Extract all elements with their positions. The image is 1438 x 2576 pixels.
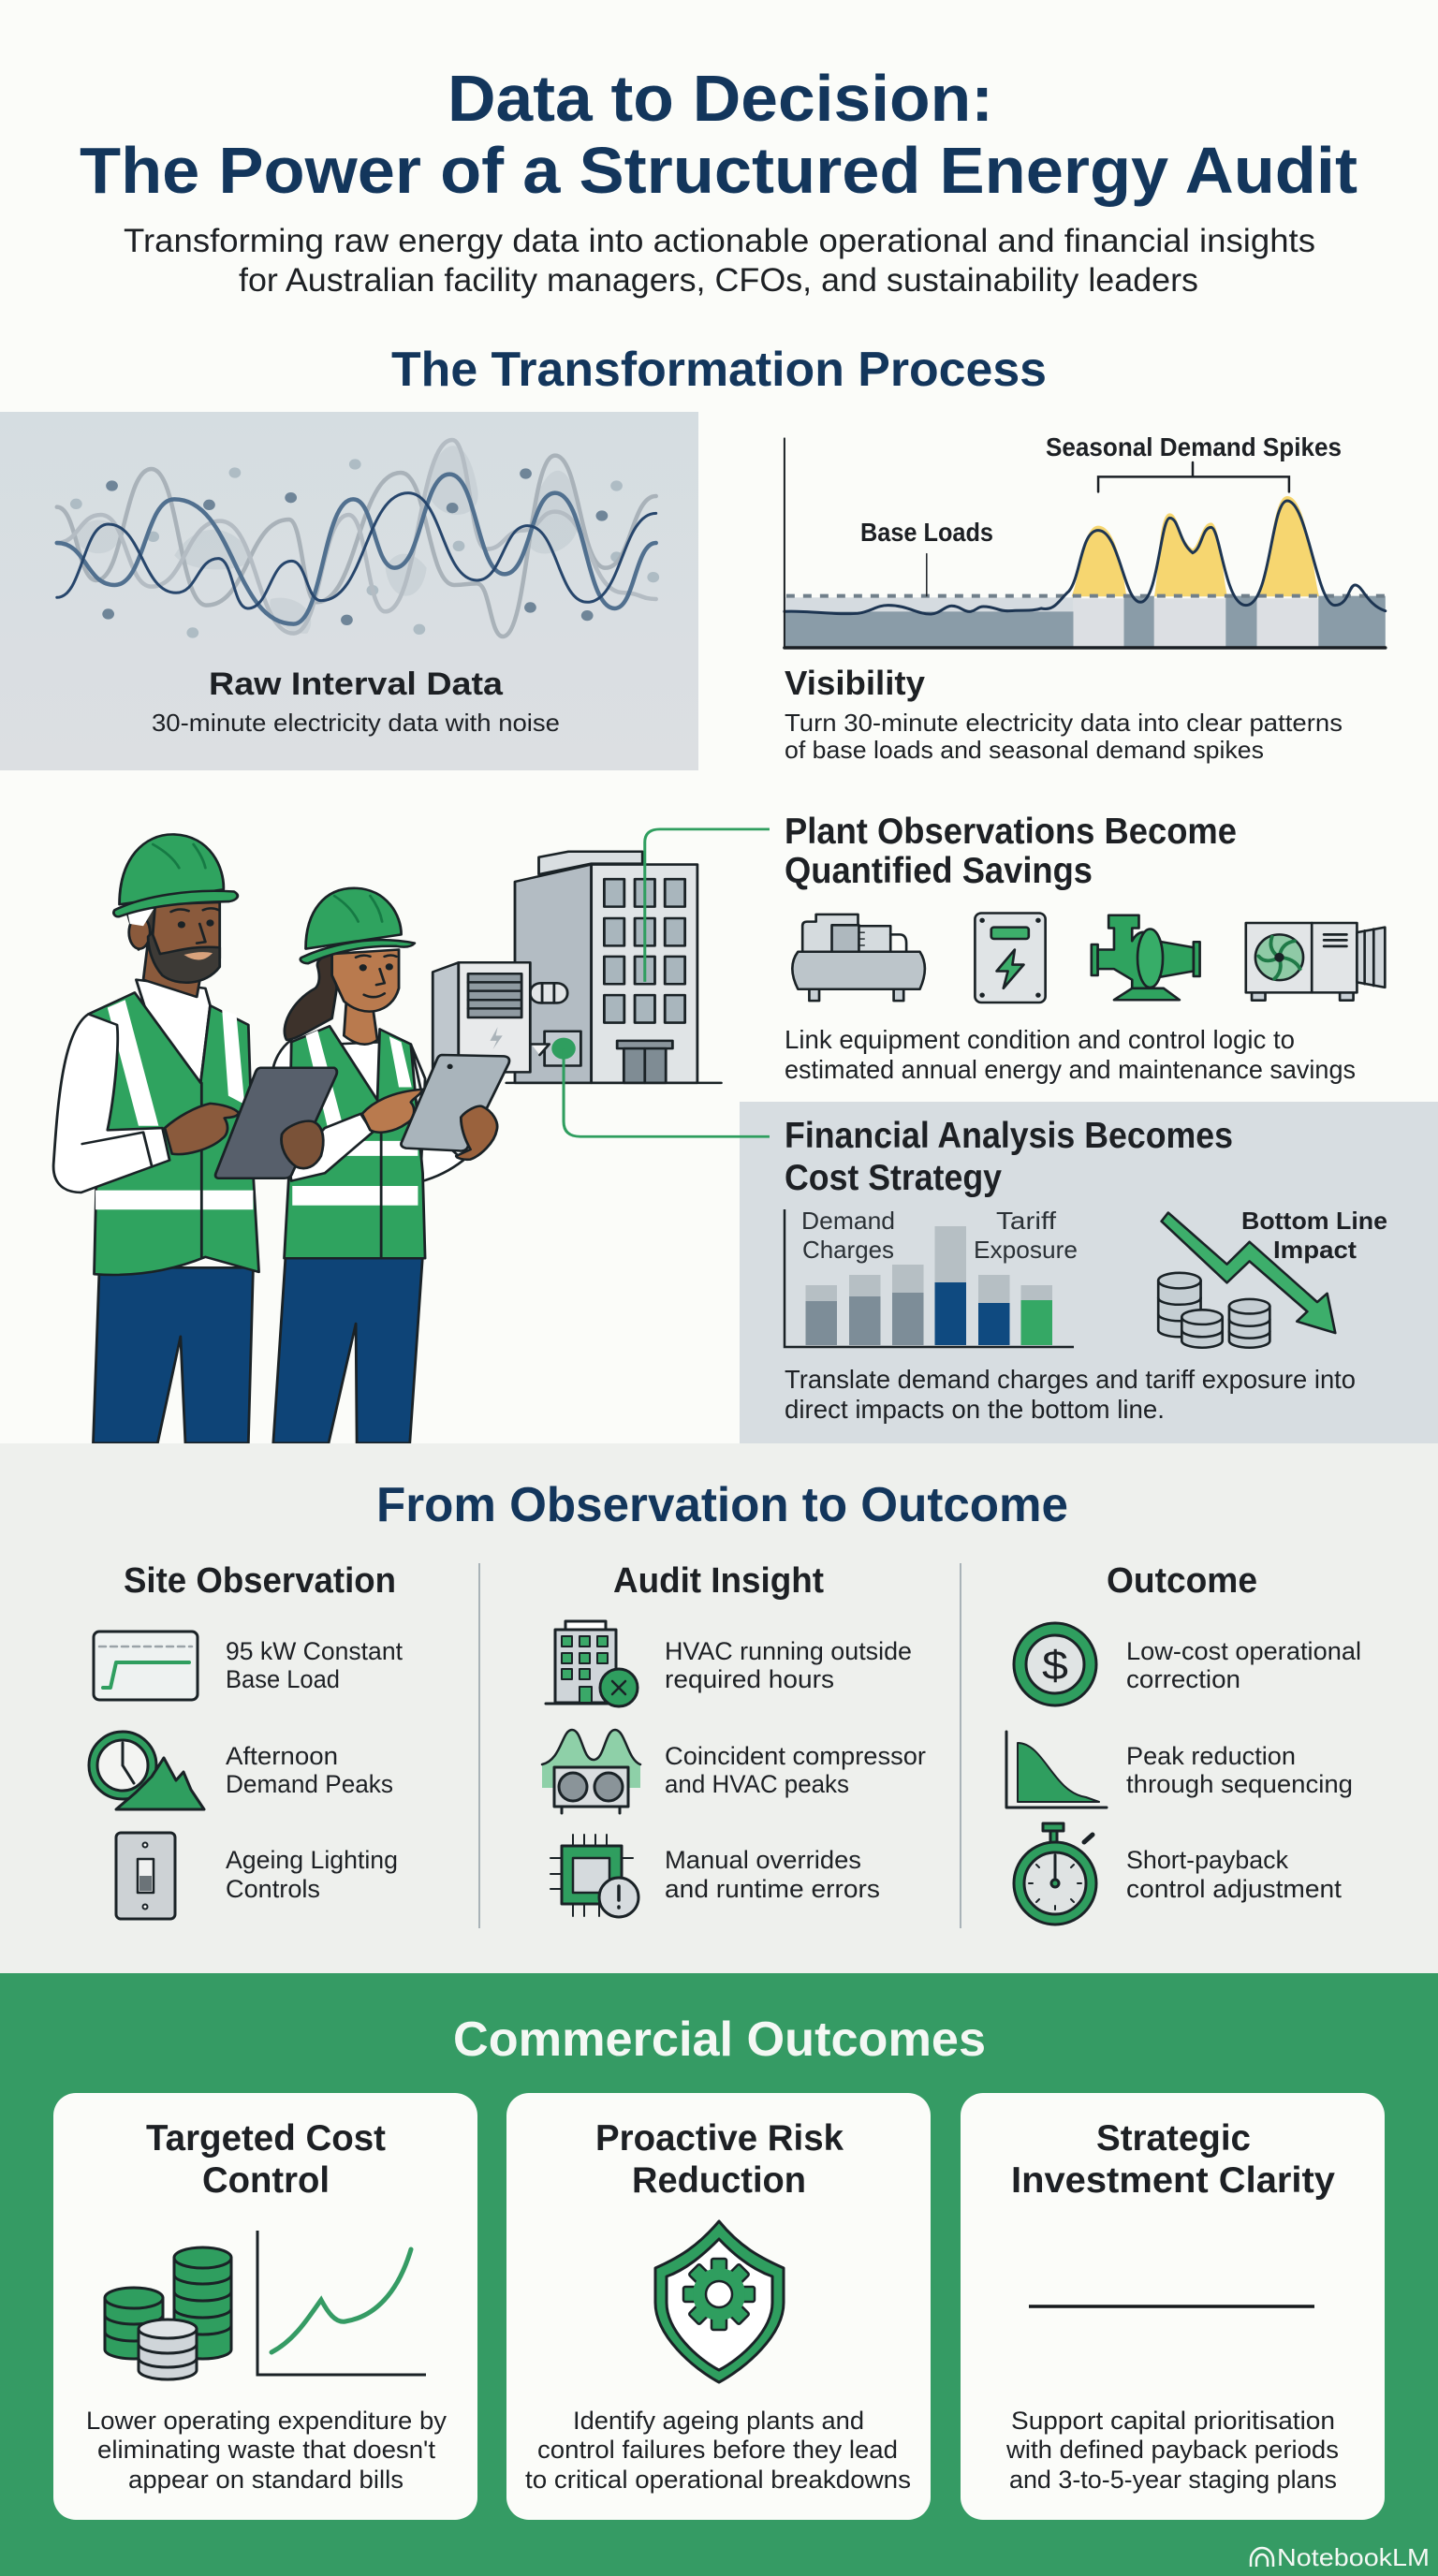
- panel: plant observations: [785, 812, 1385, 1084]
- heading: financial analysis: [785, 1116, 1233, 1198]
- heading: plant observations: Quantified Savings: [785, 851, 1093, 891]
- icon: dollar coin: [1014, 1623, 1096, 1705]
- text: coincident: [665, 1742, 926, 1798]
- bar chart: demand and tariff: [785, 1207, 1078, 1347]
- card title: Control: [202, 2160, 330, 2201]
- column heading: Site Observation: [124, 1561, 396, 1601]
- card title: [146, 2118, 386, 2201]
- text: afternoon: Demand Peaks: [226, 1770, 393, 1798]
- column heading: Outcome: [1107, 1561, 1257, 1601]
- text: peak reduction: [1126, 1742, 1353, 1798]
- text: short-payback: Short-payback: [1126, 1846, 1288, 1874]
- text: plant description: Link equipment condition and control logic to: [785, 1025, 1295, 1054]
- worker: man: [53, 834, 337, 1443]
- icon: pump: [1092, 915, 1200, 1000]
- icon: shield with gear: [655, 2221, 784, 2382]
- card: strategic investment clarity: [961, 2093, 1385, 2520]
- label: base loads: Base Loads: [860, 518, 993, 547]
- text: hvac running: HVAC running outside: [665, 1637, 912, 1665]
- label: raw interval data: Raw Interval Data: [209, 666, 504, 702]
- card text: [1005, 2407, 1339, 2494]
- heading: financial analysis: Cost Strategy: [785, 1158, 1002, 1198]
- card text: Support capital prioritisation: [1011, 2407, 1335, 2435]
- text: short-payback: control adjustment: [1126, 1875, 1343, 1903]
- label: bottom line impact: Impact: [1273, 1236, 1357, 1264]
- panel: commercial outcomes: [0, 1973, 1438, 2576]
- text: peak reduction: Peak reduction: [1126, 1742, 1296, 1770]
- heading: visibility: Visibility: [785, 664, 925, 702]
- text: hvac running: [665, 1637, 912, 1693]
- card title: Strategic: [1096, 2118, 1251, 2159]
- icon: chiller: [792, 915, 925, 1001]
- subtitle: [124, 223, 1315, 299]
- label: tariff exposure: Exposure: [974, 1236, 1078, 1264]
- equipment icons: [792, 913, 1385, 1003]
- column: audit insight: [542, 1561, 926, 1917]
- subtitle: Transforming raw energy data into actionable operational and financial insights: [124, 223, 1315, 259]
- icon: constant base load: [94, 1632, 198, 1700]
- connector lines: [564, 829, 770, 1136]
- text: coincident: and HVAC peaks: [665, 1770, 849, 1798]
- text: manual overrides: [665, 1846, 880, 1903]
- label: tariff exposure: Tariff: [996, 1207, 1057, 1235]
- text: visibility description: of base loads and seasonal demand spikes: [785, 736, 1264, 764]
- card text: appear on standard bills: [128, 2466, 404, 2494]
- text: 95 kW: [226, 1637, 403, 1693]
- text: ageing lighting: Ageing Lighting: [226, 1846, 398, 1874]
- icon: dollar coin: $: [1042, 1643, 1068, 1689]
- heading: plant observations: Plant Observations Become: [785, 812, 1237, 852]
- icon: chip with alert: [550, 1835, 638, 1917]
- heading: commercial outcomes: Commercial Outcomes: [453, 2012, 986, 2067]
- label: tariff exposure: [974, 1207, 1078, 1264]
- text: financial description: direct impacts on the bottom line.: [785, 1395, 1165, 1424]
- text: ageing lighting: [226, 1846, 398, 1903]
- text: short-payback: [1126, 1846, 1343, 1903]
- text: 95 kW: Base Load: [226, 1665, 340, 1693]
- text: peak reduction: through sequencing: [1126, 1770, 1353, 1798]
- column heading: Audit Insight: [613, 1561, 824, 1601]
- caption: raw interval data: 30-minute electricity data with noise: [152, 709, 560, 737]
- chart: noisy waveform: [57, 440, 659, 638]
- building and plant: [433, 852, 721, 1083]
- text: 95 kW: 95 kW Constant: [226, 1637, 403, 1665]
- subtitle: for Australian facility managers, CFOs, and sustainability leaders: [239, 262, 1198, 299]
- heading: the transformation process: The Transformation Process: [391, 343, 1047, 397]
- title: Data to Decision:: [448, 62, 993, 135]
- card title: Targeted Cost: [146, 2118, 386, 2159]
- label: demand charges: [801, 1207, 895, 1264]
- label: demand charges: Charges: [802, 1236, 894, 1264]
- heading: financial analysis: Financial Analysis Becomes: [785, 1116, 1233, 1156]
- text: financial description: [785, 1365, 1356, 1424]
- text: manual overrides: and runtime errors: [665, 1875, 880, 1903]
- icon: falling arrow and coins: [1158, 1213, 1335, 1348]
- rule line: [1029, 2305, 1314, 2308]
- label: bottom line impact: [1241, 1207, 1387, 1264]
- text: afternoon: Afternoon: [226, 1742, 338, 1770]
- icon: peak reduction curve: [1006, 1732, 1107, 1808]
- text: visibility description: [785, 709, 1343, 764]
- text: visibility description: Turn 30-minute electricity data into clear patterns: [785, 709, 1343, 737]
- text: coincident: Coincident compressor: [665, 1742, 926, 1770]
- panel: from observation to outcome: [0, 1443, 1438, 1973]
- text: ageing lighting: Controls: [226, 1875, 320, 1903]
- card text: to critical operational breakdowns: [525, 2466, 911, 2494]
- card title: Reduction: [632, 2160, 806, 2201]
- text: low-cost: [1126, 1637, 1361, 1693]
- card text: control failures before they lead: [537, 2436, 898, 2464]
- icon: twin peaks and compressor: [542, 1730, 640, 1813]
- panel: raw interval data: [0, 412, 698, 770]
- column: site observation: [89, 1561, 403, 1919]
- illustration: auditors and plant: [53, 829, 770, 1443]
- card title: Investment Clarity: [1011, 2160, 1335, 2201]
- card text: [86, 2407, 447, 2494]
- heading: from observation to outcome: From Observation to Outcome: [376, 1478, 1068, 1532]
- icon: electrical panel: [975, 913, 1046, 1003]
- text: afternoon: [226, 1742, 393, 1798]
- text: plant description: [785, 1025, 1356, 1084]
- card title: [595, 2118, 844, 2201]
- title: The Power of a Structured Energy Audit: [80, 134, 1357, 207]
- column: outcome: [1006, 1561, 1361, 1925]
- text: financial description: Translate demand charges and tariff exposure into: [785, 1365, 1356, 1394]
- heading: plant observations: [785, 812, 1237, 891]
- panel: financial analysis background: [740, 1102, 1438, 1443]
- card: targeted cost control: [53, 2093, 477, 2520]
- text: hvac running: required hours: [665, 1665, 834, 1693]
- icon: stopwatch: [1014, 1823, 1096, 1925]
- icon: coin stacks and rising line: [105, 2231, 426, 2379]
- icon: building with cross: [546, 1621, 638, 1706]
- worker: woman: [273, 888, 509, 1443]
- text: low-cost: correction: [1126, 1665, 1240, 1693]
- card text: Identify ageing plants and: [573, 2407, 864, 2435]
- label: demand charges: Demand: [801, 1207, 895, 1235]
- card text: with defined payback periods: [1005, 2436, 1339, 2464]
- icon: light switch: [116, 1833, 175, 1919]
- card text: and 3-to-5-year staging plans: [1009, 2466, 1337, 2494]
- panel: financial analysis: [785, 1116, 1387, 1424]
- text: manual overrides: Manual overrides: [665, 1846, 861, 1874]
- card text: eliminating waste that doesn't: [97, 2436, 435, 2464]
- title: [80, 62, 1357, 207]
- card title: [1011, 2118, 1335, 2201]
- chart: visibility load profile: [785, 432, 1386, 649]
- brand mark: NotebookLM: [1277, 2543, 1430, 2571]
- label: seasonal demand spikes: Seasonal Demand Spikes: [1046, 432, 1342, 461]
- text: low-cost: Low-cost operational: [1126, 1637, 1361, 1665]
- icon: condenser unit: [1246, 923, 1385, 1001]
- card: proactive risk reduction: [506, 2093, 931, 2520]
- text: plant description: estimated annual energy and maintenance savings: [785, 1055, 1356, 1084]
- label: bottom line impact: Bottom Line: [1241, 1207, 1387, 1235]
- card text: [525, 2407, 911, 2494]
- card text: Lower operating expenditure by: [86, 2407, 447, 2435]
- icon: clock and peak: [89, 1732, 204, 1809]
- card title: Proactive Risk: [595, 2118, 844, 2159]
